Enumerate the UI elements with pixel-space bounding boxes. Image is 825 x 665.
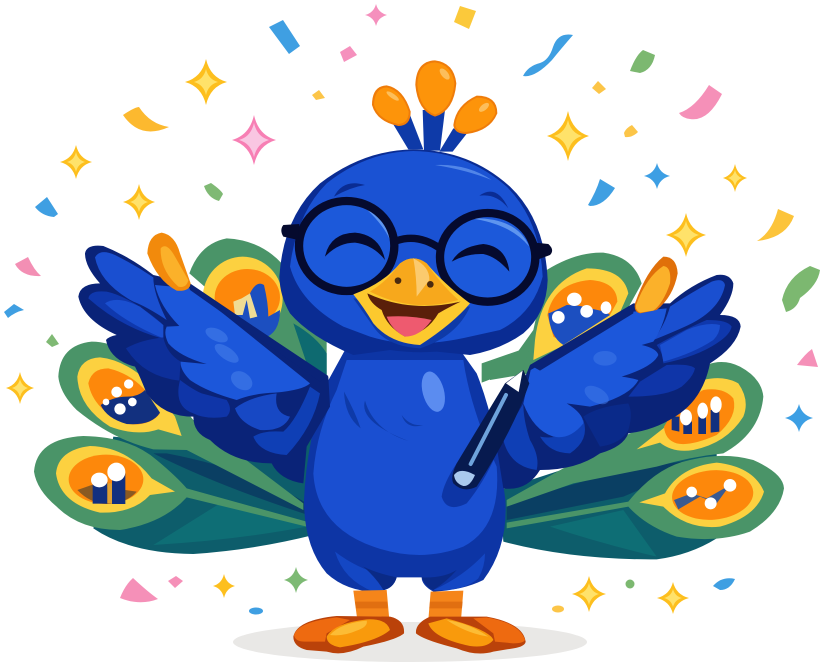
wing finger B <box>88 291 162 338</box>
head shape <box>279 149 548 355</box>
right foot <box>416 617 526 654</box>
pocket shadow <box>442 450 497 507</box>
sparkles: pink, blue, green <box>232 4 813 593</box>
left leg <box>353 590 389 620</box>
orange wing tip right <box>635 257 678 313</box>
right wing <box>497 257 741 489</box>
orange wing tip left <box>147 233 191 291</box>
pencil end <box>454 471 475 486</box>
wing finger A <box>95 252 167 320</box>
wing main <box>523 308 667 437</box>
pencil barrel <box>452 370 529 489</box>
wing main <box>155 285 310 400</box>
wing finger C <box>126 337 181 381</box>
middle feather <box>58 342 303 510</box>
wing finger A <box>653 280 725 340</box>
wing lower feathers <box>178 380 230 418</box>
belly <box>313 360 497 555</box>
forehead highlight <box>435 165 492 180</box>
teal fan base left <box>93 407 320 554</box>
legs and feet <box>293 590 526 654</box>
tail fan <box>34 238 784 559</box>
pencil <box>442 347 530 507</box>
lower feather <box>34 436 307 530</box>
pencil tip <box>506 371 523 392</box>
wing finger C <box>628 365 695 397</box>
eyebrows <box>334 183 508 208</box>
pencil stripe <box>471 395 506 464</box>
thighs <box>335 552 397 592</box>
panel: right tail feathers <box>490 253 784 559</box>
wing finger B <box>657 320 732 363</box>
wing lower feathers <box>583 403 631 447</box>
closed eyes <box>325 233 509 272</box>
sparkles: yellow <box>6 59 747 614</box>
chest highlight <box>418 369 449 414</box>
glasses <box>281 201 552 302</box>
left wing <box>78 233 330 483</box>
chest feathers <box>344 392 423 441</box>
crest <box>372 60 497 152</box>
lower feather right <box>507 456 784 539</box>
head <box>279 60 552 355</box>
ground shadow <box>233 622 587 662</box>
top feather <box>189 238 327 377</box>
green wedge <box>482 347 530 383</box>
left foot <box>293 616 404 653</box>
mouth <box>367 293 461 337</box>
right leg <box>428 591 463 620</box>
panel: left tail feathers <box>34 238 327 554</box>
teal fan base right <box>500 447 717 559</box>
middle feather right <box>507 362 763 507</box>
beak <box>353 258 470 348</box>
tongue <box>387 316 432 337</box>
body <box>304 350 506 592</box>
upper feather right <box>490 253 642 380</box>
